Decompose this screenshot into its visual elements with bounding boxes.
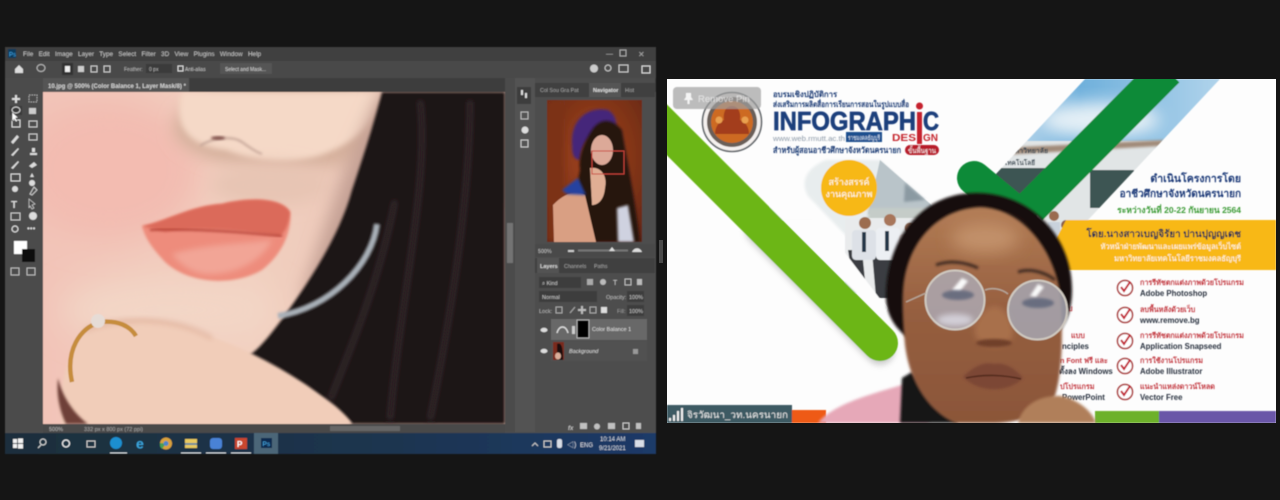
toolbar: T [11,200,17,211]
gold ring [70,314,136,382]
training heading lines [773,90,909,110]
partly hidden topics: n Font ฟรี และ [1060,356,1108,365]
layers controls: Opacity: [606,295,627,301]
topic: Vector Free: แนะนำแหล่งดาวน์โหลด [1140,382,1215,391]
hand under chin [1018,396,1096,423]
navigator tabs: Hist [625,88,635,94]
hair [248,92,505,424]
icon: mouse cursor [12,112,18,122]
yellow speaker banner: มหาวิทยาลัยเทคโนโลยีราชมงคลธัญบุรี [1114,254,1241,263]
remove pin button [673,87,761,109]
partly hidden topics: ตั้งลง Windows [1059,365,1113,376]
icon: search [38,439,46,448]
icon: photoshop active [254,433,278,454]
organiser text: ดำเนินโครงการโดย [1150,172,1241,185]
icon: edge [110,437,122,449]
menu bar: — [606,51,613,58]
menu bar [5,47,656,61]
navigator tabs [535,83,655,97]
gray hair strand [278,224,377,316]
nose [974,306,1013,346]
training heading lines: ส่งเสริมการผลิตสื่อการเรียนการสอนในรูปแบบสื่อ [773,98,909,110]
building photo strip: เทคโนโลยี [1005,158,1035,167]
yellow speaker banner [1040,220,1276,270]
topic: Adobe Photoshop: Adobe Photoshop [1140,289,1207,298]
layers tabs: Layers [540,264,558,270]
partly hidden topics: แบบ [1071,331,1085,340]
cheek blush [56,108,200,232]
document tab bar [5,78,656,92]
audience row: สำหรับผู้สอนอาชีวศึกษาจังหวัดนครนายก [773,145,901,156]
system tray: 9/21/2021 [599,446,626,452]
lips [142,200,290,281]
photo of staff group [845,214,920,298]
options bar: Select and Mask... [225,67,266,73]
topic list [1059,278,1244,402]
collar [900,372,958,423]
INFOGRAPHIC wordmark [773,102,939,144]
presenter webcam [818,193,1096,423]
system tray: ENG [580,443,593,449]
icon: photoshop active: Ps [262,441,271,448]
icon: file explorer [185,439,197,448]
toolbar [5,78,43,432]
shirt [818,384,930,423]
hand and fingers [57,319,352,424]
topic: remove.bg [1118,303,1200,325]
hair [886,193,1072,340]
yellow circle badge: งานคุณภาพ [826,189,873,200]
system tray: ◁) [567,441,576,449]
navigator thumbnail [547,100,642,242]
layers controls [539,277,644,316]
menu bar: File Edit Image Layer Type Select Filter 3D View Plugins Window Help [23,51,262,58]
menu bar: ✕ [638,50,645,59]
topic: Adobe Photoshop: การรีทัชตกแต่งภาพด้วยโปรแกรม [1140,278,1244,287]
green diagonal band with shadow [650,113,880,350]
topic: Vector Free: Vector Free [1140,393,1183,402]
status bar [43,424,505,433]
website row [772,132,938,144]
face [903,207,1062,423]
audience row: ขั้นพื้นฐาน [908,144,936,155]
system tray: 10:14 AM [600,437,625,443]
yellow circle badge [821,160,877,216]
panel: navigator [535,78,655,257]
icon: internet explorer: e [136,436,144,452]
status bar: 332 px x 800 px (72 ppi) [84,427,143,433]
menu bar: Ps [9,52,16,58]
options bar: Feather: [124,67,143,73]
navigator tabs: Navigator [593,88,619,94]
layers tabs: Paths [594,264,608,270]
website row: www.web.rmutt.ac.th [772,134,845,143]
navigator zoom slider: 500% [538,249,552,255]
philtrum shading [222,176,304,201]
title block [772,90,939,156]
navigator zoom slider [535,244,655,257]
lower face highlight [69,282,212,326]
panel: shared slide [650,70,1276,423]
yellow circle badge: สร้างสรรค์ [829,176,869,187]
website row: DES [892,133,916,144]
panel: layers [535,258,655,432]
website row: ราชมงคลธัญบุรี [848,134,880,142]
bottom colour strip [792,410,1276,423]
layer row: Background: Background [569,349,599,355]
topic: Illustrator [1118,356,1203,376]
yellow speaker banner: หัวหน้าฝ่ายพัฒนาและเผยแพร่ข้อมูลเว็บไซต์ [1100,241,1241,251]
topic: Snapseed: Application Snapseed [1140,342,1222,351]
topic: Illustrator: การใช้งานโปรแกรม [1140,356,1203,365]
partly hidden topics: ปโปรแกรม [1060,382,1095,391]
topic: remove.bg: ลบพื้นหลังด้วยเว็บ [1140,303,1196,314]
icon: cortana [62,440,70,447]
options bar: 0 px [149,67,159,73]
mouth [963,363,1023,389]
gray wedge background with building [804,160,932,234]
topic: Snapseed: การรีทัชตกแต่งภาพด้วยโปรแกรม [1140,331,1244,340]
layers controls: Lock: [539,309,553,315]
layers footer [568,423,641,432]
organiser text: ระหว่างวันที่ 20-22 กันยายน 2564 [1117,203,1241,215]
topic: Adobe Photoshop [1118,278,1244,298]
status bar: 500% [49,427,63,433]
layer row: Color Balance 1 [540,319,647,340]
icon: chrome [160,438,172,450]
layers controls: 100% [629,309,643,315]
name tag [667,405,792,423]
windows taskbar [5,433,656,454]
layers tabs [535,258,655,273]
icon: powerpoint: P [237,440,243,449]
INFOGRAPHIC wordmark: INFOGRAPH [773,106,916,136]
training heading lines: อบรมเชิงปฏิบัติการ [773,90,838,99]
layers controls: ⌕ Kind [542,281,558,287]
layers controls: Fill: [617,309,626,315]
photo: canvas with lips close-up [20,86,505,424]
layers controls: T [613,280,618,287]
organiser text: อาชีวศึกษาจังหวัดนครนายก [1120,188,1241,200]
toolbar: ••• [27,224,36,233]
layers controls: Normal [542,295,560,301]
seal logo [702,92,762,152]
layers controls: 100% [629,295,643,301]
dark green check mark [974,70,1167,216]
glasses [906,270,1067,340]
partly hidden topics: nciples [1062,342,1090,351]
icon: task view [87,441,95,447]
divider handle [660,240,662,263]
neck and jaw shade [298,92,382,291]
options bar: Anti-alias [185,67,206,73]
layer row: Color Balance 1: Color Balance 1 [592,327,631,333]
icon: start [13,438,23,448]
topic: remove.bg: www.remove.bg [1139,316,1200,325]
website row: GN [923,133,938,144]
layers footer: fx [568,426,574,432]
navigator tabs: Col Sou Gra Pat [540,88,579,94]
INFOGRAPHIC wordmark: C [923,106,939,136]
layer row: Background [540,341,647,361]
partly hidden topics [1059,304,1113,402]
topic: Illustrator: Adobe Illustrator [1140,367,1202,376]
document tab bar: 10.jpg @ 500% (Color Balance 1, Layer Mask/8) * [48,84,187,90]
partly hidden topics: PowerPoint [1062,393,1105,402]
white strip beside band [770,206,887,316]
system tray [532,437,644,452]
yellow speaker banner: โดย.นางสาวเบญจิรัยา ปานปุญญเดช [1085,227,1241,240]
icon: powerpoint [235,438,247,449]
icon: zoom [210,438,222,449]
eyebrows [936,262,1055,280]
organiser text [1117,172,1241,215]
building photo strip [996,79,1220,238]
topic: Vector Free [1118,382,1215,402]
dock column [505,78,535,432]
name tag: จิรวัฒนา_วท.นครนายก [687,410,788,421]
remove pin button: Remove Pin [698,94,750,105]
options bar [5,61,656,78]
nose [170,92,377,170]
partly hidden topics: บ [1068,304,1073,313]
topic: Snapseed [1118,331,1244,351]
layers tabs: Channels [564,264,587,270]
building photo strip: มหาวิทยาลัย [1010,147,1048,155]
panel: Photoshop window [5,47,656,454]
